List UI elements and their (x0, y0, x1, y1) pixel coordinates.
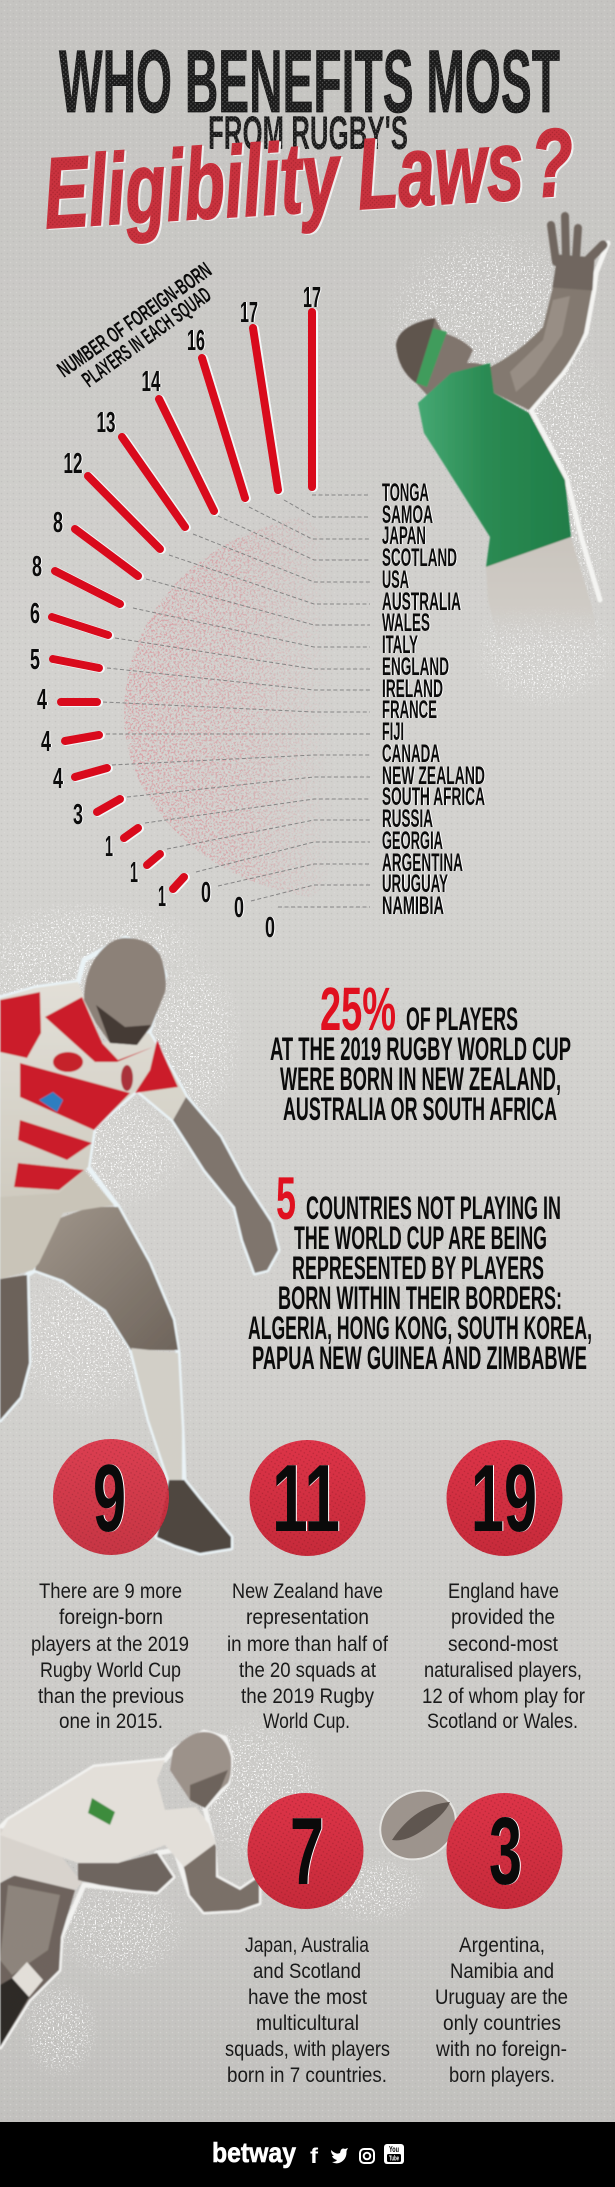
chart: country labels: TONGA (382, 479, 429, 507)
chart: bar values: 4 (53, 763, 63, 795)
head (396, 318, 490, 395)
chart: country labels: ENGLAND (382, 653, 449, 681)
chart: bar values: 0 (265, 912, 275, 944)
stat copy (270, 1001, 571, 1127)
caption: Namibia and (450, 1960, 554, 1983)
caption: second-most (448, 1633, 558, 1656)
number: 19 (471, 1445, 537, 1552)
headband (416, 328, 447, 387)
chart: bar values: 16 (187, 325, 205, 357)
knee strapping (12, 1962, 43, 1997)
chart: country labels: GEORGIA (382, 827, 443, 855)
caption: than the previous (38, 1685, 184, 1708)
caption (435, 1934, 568, 2087)
caption: born in 7 countries. (227, 2064, 387, 2087)
chart: bar values: 17 (303, 282, 321, 314)
jersey red bands (0, 992, 178, 1190)
lower leg (0, 1978, 29, 2047)
caption: 12 of whom play for (422, 1685, 585, 1708)
caption: Japan, Australia (245, 1934, 369, 1957)
chart: country labels: ITALY (382, 631, 418, 659)
chart: bar values: 8 (53, 507, 63, 539)
stat copy (248, 1190, 592, 1376)
caption (225, 1934, 390, 2087)
chart: bar values: 1 (130, 857, 138, 889)
legs (0, 1875, 75, 2047)
sock (131, 1348, 182, 1480)
chart: country labels: JAPAN (382, 522, 426, 550)
chart: country labels: IRELAND (382, 675, 443, 703)
caption: There are 9 more (39, 1580, 182, 1603)
caption: Rugby World Cup (40, 1659, 181, 1682)
big red figure: 5 (276, 1165, 296, 1232)
icon: youtube: Tube (389, 2156, 399, 2162)
shorts (0, 1828, 82, 1890)
arms (490, 287, 592, 410)
shirt (0, 1760, 216, 1867)
sponsor patch (88, 1798, 115, 1825)
head (84, 938, 166, 1045)
icon: twitter (331, 2148, 348, 2163)
jersey (0, 982, 186, 1197)
right arm and hand (184, 1823, 259, 1912)
chart: country labels: SCOTLAND (382, 544, 457, 572)
chart: country labels (382, 479, 485, 920)
chart: country labels: WALES (382, 609, 430, 637)
betway logo: betway (212, 2137, 296, 2168)
arm (173, 1097, 278, 1273)
caption: foreign-born (59, 1606, 163, 1629)
chart: bar values: 0 (201, 877, 211, 909)
caption: squads, with players (225, 2038, 390, 2061)
chart: country labels: SAMOA (382, 501, 433, 529)
fact: 9 (31, 1439, 189, 1733)
chart: bar values: 1 (105, 831, 113, 863)
fact: 11 (227, 1440, 388, 1733)
caption: one in 2015. (59, 1710, 163, 1733)
caption (227, 1580, 388, 1733)
chart: country labels: FRANCE (382, 696, 437, 724)
chart: bar values: 5 (30, 644, 40, 676)
caption: in more than half of (227, 1633, 388, 1656)
chart: bar values: 3 (73, 799, 83, 831)
caption: Scotland or Wales. (427, 1710, 578, 1733)
caption: the 20 squads at (239, 1659, 376, 1682)
hands (551, 216, 603, 290)
number: 3 (489, 1798, 522, 1905)
number: 7 (290, 1798, 324, 1905)
chart: country labels: SOUTH AFRICA (382, 783, 485, 811)
chart: bar values: 17 (240, 297, 258, 329)
icon: youtube: You (389, 2145, 399, 2154)
fact: 7 (225, 1793, 390, 2087)
chart: axis caption (53, 257, 216, 392)
caption: naturalised players, (424, 1659, 582, 1682)
left leg (0, 1275, 29, 1420)
kit logos (39, 1052, 133, 1112)
fact: 19 (422, 1440, 585, 1733)
chart: country labels: AUSTRALIA (382, 588, 461, 616)
number: 11 (272, 1445, 340, 1552)
caption: the 2019 Rugby (241, 1685, 374, 1708)
beard (96, 1005, 151, 1045)
chart: bar values: 12 (64, 448, 82, 480)
chart: country labels: RUSSIA (382, 805, 433, 833)
title line 2: FROM RUGBY'S (208, 106, 408, 159)
caption: Argentina, (459, 1934, 545, 1957)
caption: multicultural (256, 2012, 359, 2035)
chart: axis caption: NUMBER OF FOREIGN-BORN (53, 257, 216, 382)
circle (446, 1440, 562, 1556)
chart: rugby ball outline of speckles (124, 517, 338, 897)
left arm and hand (78, 1853, 173, 1892)
stat block: 5 countries (248, 1165, 592, 1376)
circle (446, 1793, 562, 1909)
chart: country labels: CANADA (382, 740, 440, 768)
rugby ball (367, 1776, 469, 1874)
footer bar (0, 2122, 615, 2187)
stat copy: OF PLAYERS (406, 1001, 518, 1037)
chart: axis caption: PLAYERS IN EACH SQUAD (77, 282, 216, 392)
chart: bar values: 0 (234, 892, 244, 924)
chart: country labels: USA (382, 566, 409, 594)
caption (422, 1580, 585, 1733)
chart: leader lines (103, 495, 370, 907)
number: 9 (93, 1445, 126, 1552)
chart: country labels: NEW ZEALAND (382, 762, 485, 790)
icon: youtube (384, 2144, 404, 2164)
caption: World Cup. (263, 1710, 350, 1733)
circle (248, 1793, 364, 1909)
shorts (0, 1170, 114, 1279)
player: Japan forward (0, 938, 278, 1553)
chart: bar values: 6 (30, 598, 40, 630)
chart: bar values: 8 (32, 551, 42, 583)
chart: bar values: 14 (142, 366, 160, 398)
caption: only countries (443, 2012, 561, 2035)
caption: provided the (451, 1606, 555, 1629)
icon: facebook: f (310, 2145, 319, 2168)
chart: bar values: 1 (158, 881, 166, 913)
caption: England have (448, 1580, 559, 1603)
chart: bar values (30, 282, 321, 944)
chart: country labels: URUGUAY (382, 870, 448, 898)
chart: red radial bars (52, 312, 314, 890)
big red figure: 25% (320, 975, 396, 1043)
title (41, 31, 576, 250)
chart: country labels: FIJI (382, 718, 404, 746)
caption: players at the 2019 (31, 1633, 189, 1656)
caption: born players. (449, 2064, 555, 2087)
player: England scrum-half (0, 1732, 259, 2047)
chart: bar values: 13 (96, 407, 116, 439)
icon: instagram (360, 2149, 374, 2163)
fact: 3 (435, 1793, 568, 2087)
caption: have the most (248, 1986, 367, 2009)
boot (157, 1480, 231, 1553)
caption (31, 1580, 189, 1733)
chart: country labels: NAMIBIA (382, 892, 444, 920)
caption: representation (246, 1606, 369, 1629)
chart: country labels: ARGENTINA (382, 849, 463, 877)
title line 3: ? (528, 109, 576, 218)
shorts (486, 537, 600, 650)
caption: Uruguay are the (435, 1986, 568, 2009)
head (170, 1732, 231, 1808)
player: Ireland lineout jumper (396, 216, 608, 650)
chart: bar values: 4 (37, 684, 47, 716)
caption: with no foreign- (435, 2038, 567, 2061)
green shirt (418, 363, 571, 567)
circle (53, 1439, 169, 1555)
circle (250, 1440, 366, 1556)
caption: New Zealand have (232, 1580, 383, 1603)
stat block: 25% (270, 975, 571, 1127)
caption: and Scotland (253, 1960, 361, 1983)
right thigh and calf (35, 1207, 178, 1350)
chart: bar values: 4 (41, 726, 51, 758)
